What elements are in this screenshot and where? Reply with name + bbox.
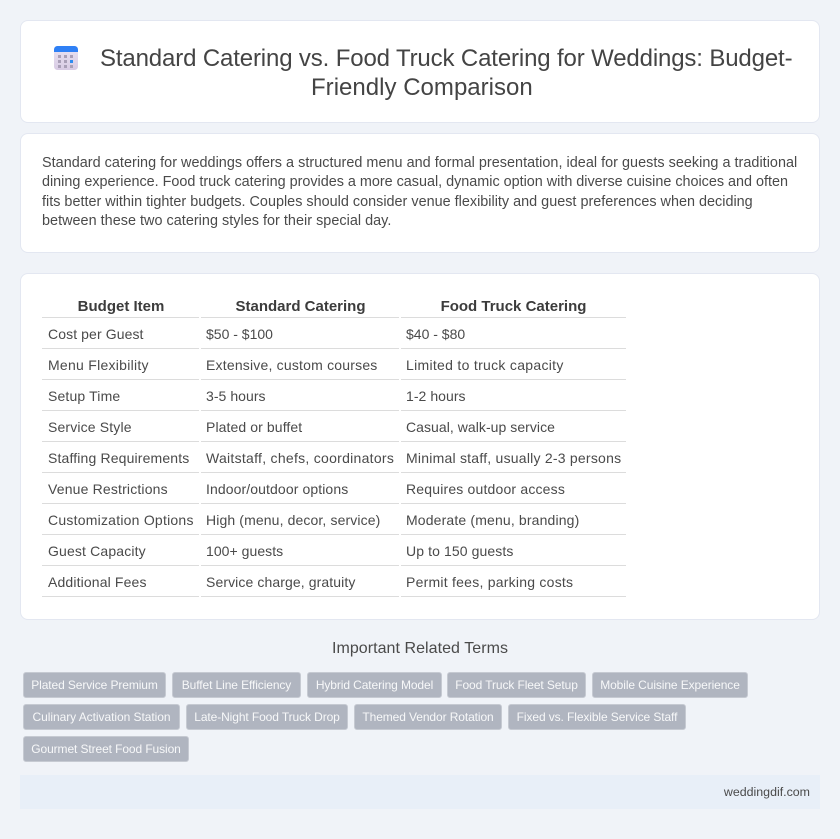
panel: header bbox=[20, 20, 820, 123]
row: guest capacity: Guest Capacity bbox=[48, 543, 146, 559]
row: menu flexibility: Menu Flexibility bbox=[48, 357, 149, 373]
tag: Late-Night Food Truck Drop bbox=[194, 710, 340, 724]
description text bbox=[42, 155, 797, 229]
panel: comparison table bbox=[20, 273, 820, 620]
row: venue restrictions: Requires outdoor access bbox=[406, 481, 565, 497]
row: additional fees: Permit fees, parking costs bbox=[406, 574, 573, 590]
title: Standard Catering vs. Food Truck Catering for Weddings: Budget- bbox=[100, 45, 792, 72]
table header: standard catering: Standard Catering bbox=[235, 298, 366, 315]
tag bbox=[23, 704, 180, 730]
tag: Fixed vs. Flexible Service Staff bbox=[517, 710, 677, 724]
icon: calendar bbox=[54, 46, 78, 70]
tag: Plated Service Premium bbox=[31, 678, 158, 692]
row: venue restrictions: Indoor/outdoor options bbox=[206, 481, 348, 497]
description text: fits better within tighter budgets. Couples should consider venue flexibility and guest preferences when deciding bbox=[42, 194, 753, 210]
row: cost per guest bbox=[48, 326, 465, 342]
tag bbox=[307, 672, 442, 698]
row: menu flexibility: Extensive, custom courses bbox=[206, 357, 378, 373]
row: staffing requirements: Minimal staff, usually 2-3 persons bbox=[406, 450, 621, 466]
row: setup time: 3-5 hours bbox=[206, 388, 266, 404]
description text: Standard catering for weddings offers a structured menu and formal presentation, ideal for guests seeking a traditional bbox=[42, 155, 797, 171]
footer bar bbox=[20, 775, 820, 809]
row: service style bbox=[48, 419, 555, 435]
row: customization options: Moderate (menu, branding) bbox=[406, 512, 579, 528]
row: menu flexibility: Limited to truck capacity bbox=[406, 357, 564, 373]
row: venue restrictions bbox=[48, 481, 565, 497]
tag: Gourmet Street Food Fusion bbox=[31, 742, 181, 756]
row: guest capacity: 100+ guests bbox=[206, 543, 283, 559]
panel: description bbox=[20, 133, 820, 253]
row: setup time: Setup Time bbox=[48, 388, 120, 404]
table header: budget item: Budget Item bbox=[78, 298, 164, 315]
tag: Hybrid Catering Model bbox=[316, 678, 433, 692]
description text: dining experience. Food truck catering provides a more casual, dynamic option with diverse cuisine choices and often bbox=[42, 174, 788, 190]
title bbox=[100, 45, 792, 101]
row: service style: Service Style bbox=[48, 419, 132, 435]
row: additional fees: Additional Fees bbox=[48, 574, 147, 590]
table header: food truck catering: Food Truck Catering bbox=[441, 298, 586, 315]
tag bbox=[592, 672, 748, 698]
row: guest capacity bbox=[48, 543, 513, 559]
tag bbox=[508, 704, 686, 730]
tag: Themed Vendor Rotation bbox=[362, 710, 494, 724]
row: customization options bbox=[48, 512, 579, 528]
tag bbox=[172, 672, 301, 698]
tag bbox=[186, 704, 348, 730]
tag bbox=[447, 672, 586, 698]
tag: Buffet Line Efficiency bbox=[182, 678, 291, 692]
tag bbox=[23, 736, 189, 762]
row: cost per guest: $50 - $100 bbox=[206, 326, 273, 342]
row: customization options: Customization Options bbox=[48, 512, 194, 528]
title: Friendly Comparison bbox=[311, 74, 533, 101]
description text: between these two catering styles for their special day. bbox=[42, 213, 391, 229]
footer text: weddingdif.com bbox=[724, 785, 810, 799]
row: additional fees bbox=[48, 574, 573, 590]
row: cost per guest: Cost per Guest bbox=[48, 326, 144, 342]
row: setup time: 1-2 hours bbox=[406, 388, 466, 404]
tag: Food Truck Fleet Setup bbox=[455, 678, 578, 692]
row: guest capacity: Up to 150 guests bbox=[406, 543, 513, 559]
tag: Culinary Activation Station bbox=[32, 710, 171, 724]
row: additional fees: Service charge, gratuity bbox=[206, 574, 355, 590]
row: staffing requirements: Staffing Requirements bbox=[48, 450, 189, 466]
row: service style: Casual, walk-up service bbox=[406, 419, 555, 435]
row: customization options: High (menu, decor, service) bbox=[206, 512, 380, 528]
row: venue restrictions: Venue Restrictions bbox=[48, 481, 168, 497]
heading: important related terms: Important Related Terms bbox=[332, 640, 508, 657]
row: staffing requirements: Waitstaff, chefs, coordinators bbox=[206, 450, 394, 466]
row: service style: Plated or buffet bbox=[206, 419, 302, 435]
row: menu flexibility bbox=[48, 357, 564, 373]
row: cost per guest: $40 - $80 bbox=[406, 326, 465, 342]
row: staffing requirements bbox=[48, 450, 621, 466]
tag bbox=[354, 704, 502, 730]
tag: Mobile Cuisine Experience bbox=[600, 678, 740, 692]
tag bbox=[23, 672, 166, 698]
row: setup time bbox=[48, 388, 466, 404]
